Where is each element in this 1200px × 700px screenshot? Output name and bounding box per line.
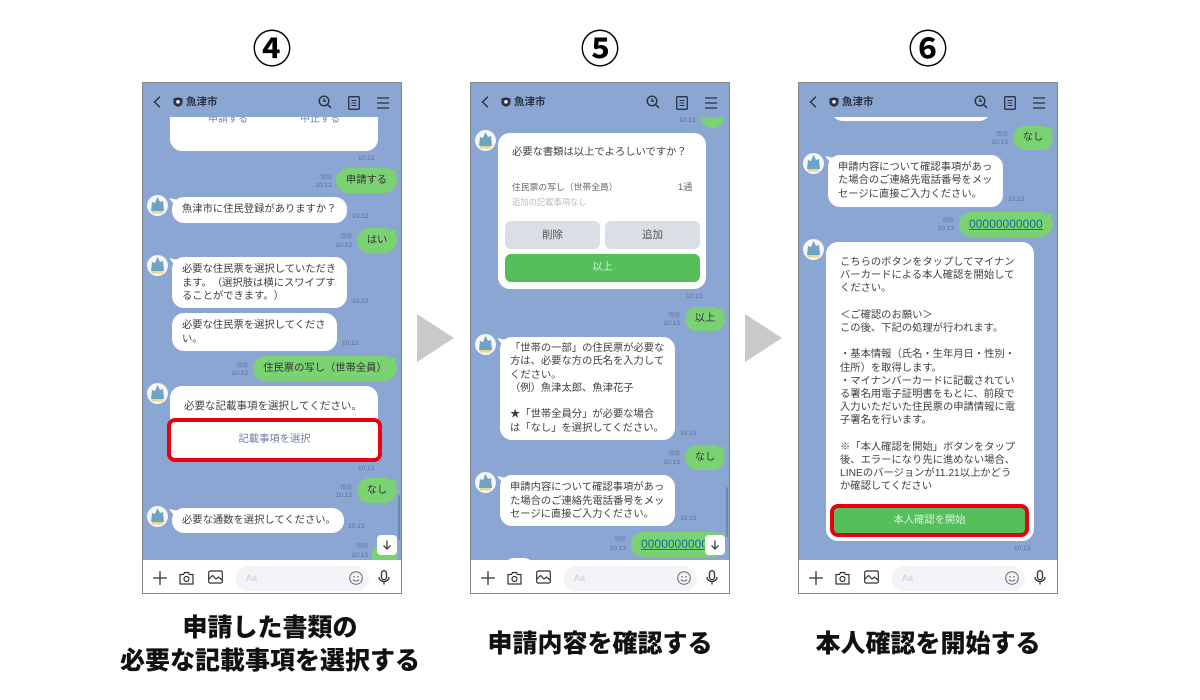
top card with cut-off buttons: 中止する [300,114,340,125]
mascot avatar [147,195,168,216]
card: identity verification instructions: ・マイナンバーカードに記載されてい [840,376,1015,387]
card: identity verification instructions: 住所）を取得します。 [840,362,942,374]
mascot avatar [475,472,496,493]
card: identity verification instructions: ※「本人確認を開始」ボタンをタップ [840,442,1015,453]
card: confirm documents [498,133,706,289]
card: identity verification instructions: ＜ご確認のお願い＞ [840,310,933,321]
step number 5: ⑤ [580,29,620,72]
time: 10:13 [351,552,368,559]
input bar: Aa [246,573,257,583]
green bubble: copy of residence certificate [253,356,397,381]
green bubble: phone number [631,532,725,557]
caption step 6: 本人確認を開始する [815,630,1040,658]
scrollbar [726,487,728,537]
time: 10:13 [679,117,696,124]
scroll down button [705,535,725,555]
read mark: 既読 [615,537,626,543]
document row: 住民票の写し（世帯全員） [512,182,618,192]
time: 10:12 [315,182,332,189]
scroll down button [377,535,397,555]
input bar [142,560,402,594]
arrow: step 5 to 6 [745,314,782,362]
white bubble: please select: 必要な住民票を選択してくださ [182,320,326,331]
green bubble: none: なし [695,452,715,463]
next bubble peek [504,558,534,578]
green bubble: apply: 申請する [346,175,387,186]
delete button: 削除 [542,229,563,241]
mascot avatar [803,153,824,174]
white bubble: registered question [172,197,347,223]
card: identity verification instructions: バーカードによる本人確認を開始して [840,270,1014,281]
green bubble: copy of residence certificate: 住民票の写し（世帯全員） [263,363,387,374]
caption step 4: 必要な記載事項を選択する [120,647,420,675]
white bubble: part of household: （例）魚津太郎、魚津花子 [510,383,634,394]
mascot avatar [475,130,496,151]
delete button [505,221,600,249]
mascot avatar [803,239,824,260]
white bubble: select copies: 必要な通数を選択してください。 [182,515,336,526]
white bubble: contact phone: 申請内容について確認事項があっ [510,482,664,493]
time: 10:13 [991,139,1008,146]
green bubble: none [357,478,397,503]
arrow: step 4 to 5 [417,314,454,362]
white bubble: please select [172,313,337,351]
scrollbar [398,495,400,540]
white bubble: part of household: は「なし」を選択してください。 [510,423,664,434]
chat header [798,82,1058,117]
green bubble: cut off [372,543,397,568]
time: 10:12 [342,340,359,347]
white bubble: part of household: 方は、必要な方の氏名を入力して [510,356,664,367]
green bubble: done: 以上 [695,313,715,324]
card: select entries prompt [170,386,378,446]
chat header: 魚津市 [842,96,874,108]
white bubble: select copies [172,508,344,533]
green bubble: yes: はい [367,235,387,246]
time: 10:13 [686,293,703,300]
white bubble: select residence certificate: ることができます。） [182,291,284,302]
document quantity: 1通 [678,182,692,192]
card: identity verification instructions [826,242,1034,541]
panel: phone screen step 5 [470,82,730,594]
green bubble: phone number [959,212,1053,237]
white bubble: please select: い。 [182,334,203,345]
time: 10:13 [1008,196,1025,203]
green bubble: yes [357,228,397,253]
white bubble: cut off top [831,97,991,121]
time: 10:12 [335,242,352,249]
white bubble: contact phone [500,475,675,526]
mascot avatar [147,383,168,404]
green bubble: none: なし [1023,132,1043,143]
card question: 必要な書類は以上でよろしいですか？ [512,147,687,158]
read mark: 既読 [321,175,332,181]
white bubble: part of household: ください。 [510,370,561,381]
top card with cut-off buttons [170,102,378,151]
card: identity verification instructions: か確認してください [840,481,932,492]
white bubble: registered question: 魚津市に住民登録がありますか？ [182,204,336,215]
panel: phone screen step 4 [142,82,402,594]
step number 6: ⑥ [908,29,948,72]
time: 10:12 [335,492,352,499]
red highlight: select entries button [167,418,382,462]
time: 10:12 [358,155,375,162]
green bubble: none: なし [367,485,387,496]
red highlight: start verification button: 本人確認を開始 [893,515,966,526]
card: identity verification instructions: LINEのバージョンが11.21以上かどう [840,468,1011,479]
time: 10:12 [231,370,248,377]
white bubble: part of household [500,337,675,440]
white bubble: select residence certificate: 必要な住民票を選択していただき [182,264,336,275]
card: identity verification instructions: 後、エラーになり先に進めない場合、 [840,455,1015,466]
input bar [798,560,1058,594]
white bubble: contact phone: 申請内容について確認事項があっ [838,162,992,173]
read mark: 既読 [237,363,248,369]
read mark: 既読 [341,485,352,491]
card: identity verification instructions: る署名用電子証明書をもとに、前段で [840,389,1015,400]
card: select entries prompt: 必要な記載事項を選択してください。 [184,400,362,412]
card: identity verification instructions: ・基本情報（氏名・生年月日・性別・ [840,349,1015,360]
time: 10:12 [358,465,375,472]
chat header [142,82,402,117]
card: identity verification instructions: この後、下記の処理が行われます。 [840,323,1003,334]
green bubble: done [685,307,725,331]
white bubble: contact phone: た場合のご連絡先電話番号をメッ [510,496,664,506]
input bar: Aa [902,573,913,583]
card: identity verification instructions: ください。 [840,283,891,294]
green bubble: cut off top [700,102,725,128]
read mark: 既読 [669,451,680,457]
time: 10:12 [352,213,369,220]
white bubble: contact phone: セージに直接ご入力ください。 [510,509,654,520]
chat header [470,82,730,117]
add button [605,221,700,249]
done button: 以上 [592,262,612,273]
red highlight: select entries button: 記載事項を選択 [238,434,311,445]
white bubble: contact phone [828,155,1003,207]
read mark: 既読 [357,544,368,550]
panel: phone screen step 6 [798,82,1058,594]
green bubble: none [685,445,725,470]
done button [505,254,700,282]
white bubble: part of household: ★「世帯全員分」が必要な場合 [510,409,654,420]
step number 4: ④ [252,29,292,72]
top card with cut-off buttons: 申請する [208,114,248,125]
card: identity verification instructions: 入力いただいた住民票の申請情報に電 [840,402,1015,413]
chat header: 魚津市 [514,96,546,108]
caption step 5: 申請内容を確認する [487,630,712,658]
caption step 4: 申請した書類の [182,614,358,642]
time: 10:13 [937,225,954,232]
caption step 4 [120,614,420,675]
card: identity verification instructions: こちらのボタンをタップしてマイナン [840,257,1015,268]
white bubble: contact phone: セージに直接ご入力ください。 [838,189,982,200]
read mark: 既読 [997,132,1008,138]
add button: 追加 [642,229,663,241]
read mark: 既読 [669,313,680,319]
extra entries note: 追加の記載事項なし [512,197,587,207]
green bubble: none [1013,126,1053,150]
mascot avatar [147,255,168,276]
white bubble: part of household: 「世帯の一部」の住民票が必要な [510,343,664,354]
white bubble: contact phone: た場合のご連絡先電話番号をメッ [838,175,992,186]
white bubble: select residence certificate [172,257,347,308]
green bubble: phone number: 00000000000 [641,537,715,551]
red highlight: start verification button [830,504,1029,537]
time: 10:13 [663,320,680,327]
mascot avatar [475,334,496,355]
time: 10:12 [352,298,369,305]
time: 10:13 [609,545,626,552]
time: 10:13 [680,430,697,437]
green bubble: apply [336,168,397,193]
read mark: 既読 [341,234,352,240]
chat header: 魚津市 [186,96,218,108]
card: identity verification instructions: 子署名を行います。 [840,415,932,426]
time: 10:13 [348,523,365,530]
input bar: Aa [574,573,585,583]
green bubble: phone number: 00000000000 [969,217,1043,231]
time: 10:13 [663,459,680,466]
mascot avatar [147,506,168,527]
white bubble: select residence certificate: ます。（選択肢は横にスワイプす [182,278,335,289]
read mark: 既読 [943,218,954,224]
time: 10:13 [680,515,697,522]
time: 10:13 [1014,545,1031,552]
input bar [470,560,730,594]
